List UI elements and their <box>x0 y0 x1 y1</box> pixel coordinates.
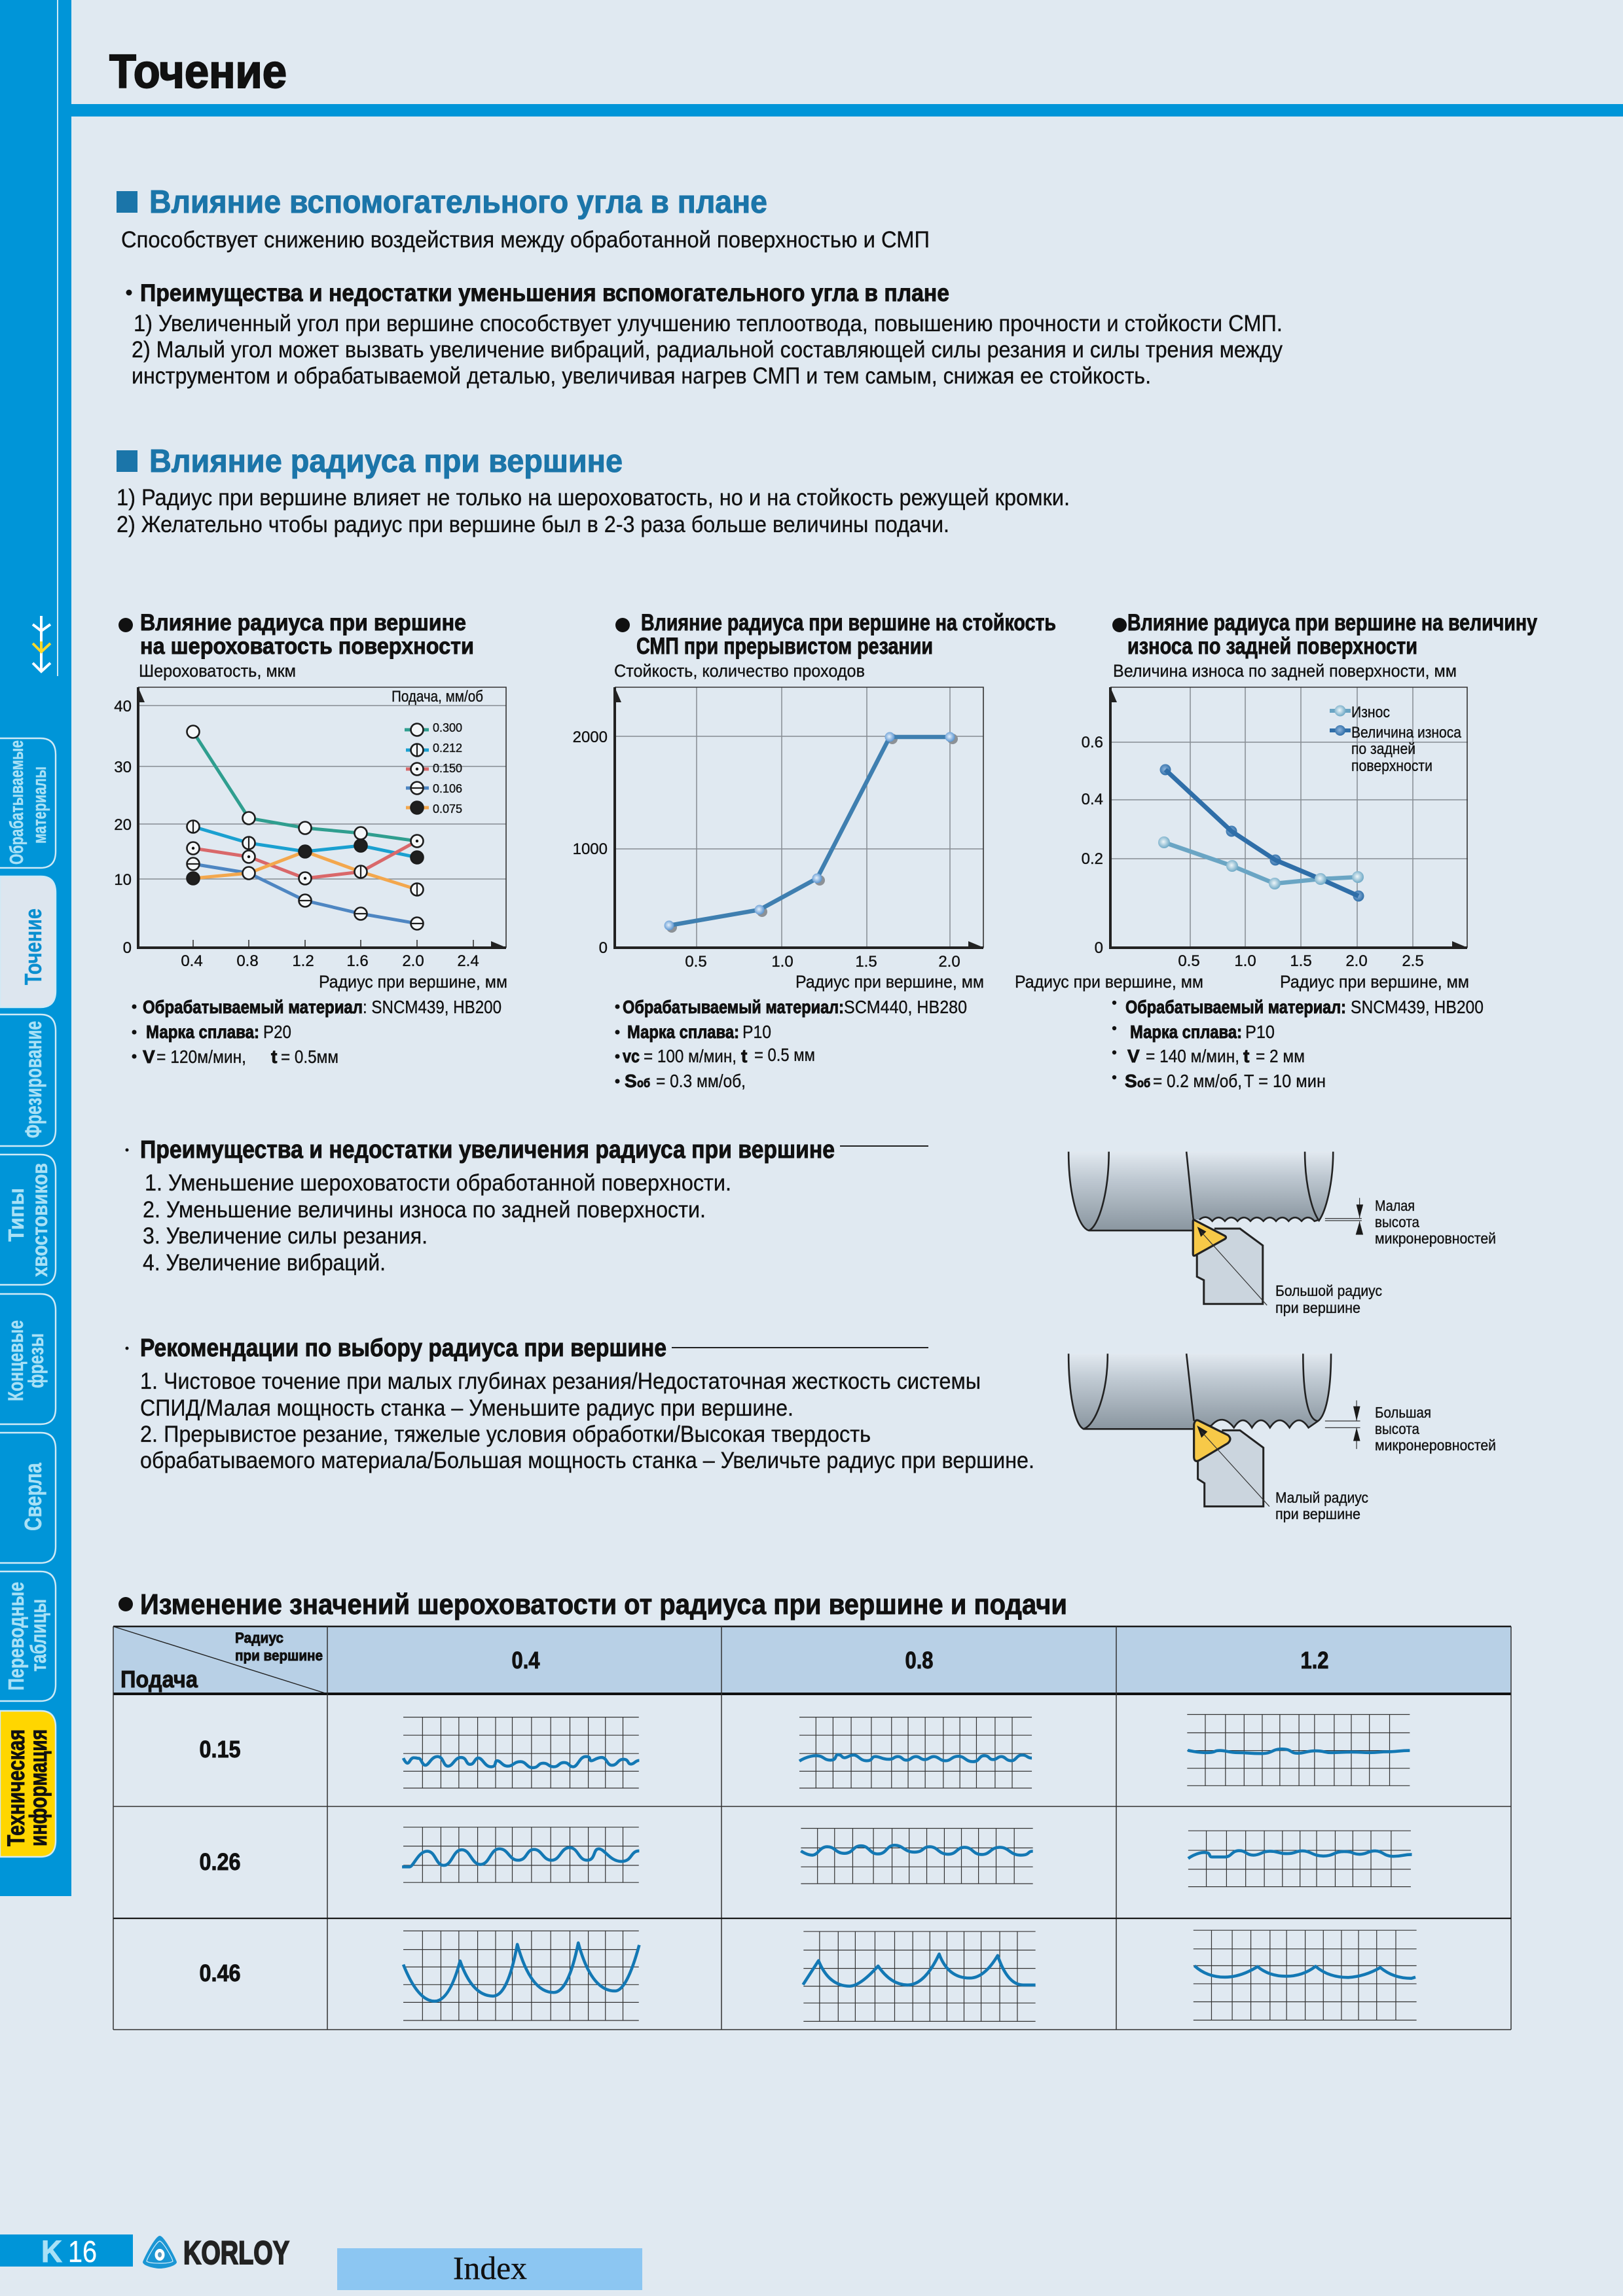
panel: roughness chart <box>114 610 507 1067</box>
line chart: roughness: 30 <box>114 759 132 776</box>
text block: points: 1) Увеличенный угол при вершине способствует улучшению теплоотвода, повышению прочности и стойкости СМП. <box>134 311 1283 336</box>
legend: Величина износа <box>1351 724 1462 742</box>
line chart: flank wear: 2.0 <box>1345 952 1368 970</box>
line chart: flank wear: Радиус при вершине, мм <box>1280 972 1469 992</box>
series markers <box>187 725 423 929</box>
section: side cutting angle <box>117 185 1283 389</box>
footer: page number: K <box>41 2234 62 2269</box>
line chart: tool life: 0.5 <box>685 953 707 971</box>
feed labels: 0.46 <box>199 1960 241 1986</box>
test conditions: P10 <box>1245 1022 1275 1042</box>
legend: по задней <box>1351 740 1415 758</box>
line chart: flank wear: 0.2 <box>1082 850 1103 868</box>
test conditions: Обрабатываемый материал <box>143 997 363 1017</box>
tab: end mills <box>0 1294 56 1424</box>
title rule <box>70 104 1623 117</box>
tab: end mills: Концевые <box>4 1320 27 1401</box>
label: large roughness height: высота <box>1375 1420 1419 1437</box>
chart heading: СМП при прерывистом резании <box>636 634 933 659</box>
line chart: tool life: Радиус при вершине, мм <box>795 972 984 992</box>
label: large nose radius: при вершине <box>1275 1299 1360 1316</box>
text block: intro: Способствует снижению воздействия между обработанной поверхностью и СМП <box>121 227 930 253</box>
line chart: flank wear: 2.5 <box>1402 952 1424 970</box>
table rules <box>113 1626 1511 2030</box>
test conditions: об <box>637 1077 650 1090</box>
label: small nose radius: Малый радиус <box>1275 1489 1368 1506</box>
roughness profiles: radius 0.4 <box>402 1717 639 2020</box>
tab: turning active: Точение <box>20 908 46 985</box>
text block: radius recommendations: 1. Чистовое точение при малых глубинах резания/Недостаточная жесткость системы <box>140 1369 981 1394</box>
test conditions: = 0.5мм <box>281 1047 338 1067</box>
line chart: tool life: 1.5 <box>855 953 877 971</box>
footer: page number <box>0 2234 133 2269</box>
roughness profiles: radius 0.8 and 1.2 <box>799 1714 1417 2021</box>
label: large roughness height: микронеровностей <box>1375 1437 1496 1454</box>
test conditions: об <box>1137 1077 1150 1090</box>
test conditions <box>132 997 501 1067</box>
test conditions: P10 <box>742 1022 771 1042</box>
test conditions: = 2 мм <box>1256 1046 1305 1066</box>
heading: Влияние радиуса при вершине <box>149 444 623 479</box>
logo: Korloy: KORLOY <box>183 2234 289 2271</box>
tab: shank types: хвостовиков <box>27 1163 52 1277</box>
text block: points: 2) Малый угол может вызвать увеличение вибраций, радиальной составляющей силы резания и силы трения между <box>132 337 1283 363</box>
legend: Подача, мм/об <box>392 688 483 706</box>
heading: Влияние вспомогательного угла в плане <box>149 185 767 220</box>
text block: radius recommendations <box>126 1335 1034 1473</box>
legend: Износ <box>1351 704 1390 721</box>
line chart: flank wear: 0.6 <box>1082 734 1103 751</box>
tab: workpiece materials: Обрабатываемые <box>7 740 27 865</box>
line chart: flank wear <box>1015 687 1469 992</box>
label: small roughness height: высота <box>1375 1213 1419 1230</box>
label: large roughness height <box>1375 1404 1496 1454</box>
test conditions: vc <box>623 1046 640 1066</box>
panel: flank wear chart <box>1015 610 1537 1091</box>
label: large nose radius <box>1275 1282 1382 1316</box>
legend: 0.106 <box>433 782 462 795</box>
test conditions: = 100 м/мин, <box>644 1046 737 1066</box>
chart heading <box>1112 610 1537 659</box>
test conditions: S <box>625 1071 637 1091</box>
table header row: Радиус <box>235 1630 283 1646</box>
line chart: roughness: 2.4 <box>457 952 479 970</box>
y axis title: Стойкость, количество проходов <box>614 661 865 681</box>
title: Точение <box>109 46 287 98</box>
test conditions: Обрабатываемый материал: <box>623 997 844 1017</box>
tab: workpiece materials: материалы <box>29 766 50 844</box>
line chart: tool life: 1000 <box>573 840 608 858</box>
panel: tool life chart <box>573 610 1056 1091</box>
tab: turning active <box>0 876 56 1007</box>
tab: technical information active yellow: Техническая <box>3 1729 29 1846</box>
line chart: tool life: 1.0 <box>771 953 793 971</box>
text block: pros and cons of larger radius <box>126 1136 928 1276</box>
text block: pros and cons of larger radius: 1. Уменьшение шероховатости обработанной поверхности. <box>145 1170 731 1196</box>
line chart: roughness: 40 <box>114 698 132 715</box>
text block: pros and cons of larger radius: Преимущества и недостатки увеличения радиуса при вершине <box>140 1136 835 1164</box>
text block: pros and cons of larger radius: 2. Уменьшение величины износа по задней поверхности. <box>143 1197 706 1223</box>
feed labels: 0.15 <box>199 1736 241 1763</box>
subheading: Преимущества и недостатки уменьшения вспомогательного угла в плане <box>140 279 949 306</box>
test conditions: = 0.5 мм <box>754 1045 815 1065</box>
label: large nose radius: Большой радиус <box>1275 1282 1382 1299</box>
tab: shank types <box>0 1155 56 1285</box>
tab: workpiece materials <box>0 738 56 868</box>
test conditions: Марка сплава: <box>146 1022 259 1042</box>
test conditions: Марка сплава: <box>1130 1022 1242 1042</box>
legend: 0.150 <box>433 762 462 775</box>
legend <box>392 688 483 816</box>
line chart: roughness: 0 <box>123 939 132 957</box>
test conditions <box>615 997 967 1091</box>
panel: side navigation <box>0 0 71 1896</box>
text block: pros and cons of larger radius: 3. Увеличение силы резания. <box>143 1223 428 1249</box>
text block: radius recommendations: СПИД/Малая мощность станка – Уменьшите радиус при вершине. <box>140 1395 793 1421</box>
test conditions: : SNCM439, HB200 <box>363 997 501 1017</box>
line chart: roughness <box>114 687 507 992</box>
legend: поверхности <box>1351 757 1432 775</box>
diagram: large nose radius <box>1068 1152 1496 1316</box>
table: roughness vs radius and feed <box>113 1626 1511 2030</box>
legend <box>1330 704 1462 775</box>
icon: navigation arrows <box>33 616 50 672</box>
test conditions: P20 <box>263 1022 291 1042</box>
test conditions: SCM440, HB280 <box>844 997 967 1017</box>
footer: page number: 16 <box>68 2234 97 2269</box>
line chart: tool life: 0 <box>599 939 608 957</box>
line chart: roughness: 1.2 <box>292 952 314 970</box>
line chart: roughness: 20 <box>114 816 132 834</box>
chart heading <box>119 610 474 659</box>
label: small roughness height: микронеровностей <box>1375 1230 1496 1247</box>
legend: 0.300 <box>433 721 462 734</box>
table header row: при вершине <box>235 1647 323 1664</box>
label: small roughness height: Малая <box>1375 1197 1415 1214</box>
tab: technical information active yellow <box>0 1711 56 1857</box>
diagram: small nose radius <box>1068 1354 1496 1522</box>
test conditions: SNCM439, HB200 <box>1351 997 1484 1017</box>
tab: milling <box>0 1014 56 1146</box>
label: large roughness height: Большая <box>1375 1404 1431 1421</box>
test conditions: = 140 м/мин, <box>1146 1046 1239 1066</box>
feed labels <box>199 1736 241 1986</box>
table header row: 0.4 <box>512 1647 539 1674</box>
chart heading: износа по задней поверхности <box>1127 634 1417 659</box>
text block: points <box>132 311 1283 389</box>
tab: technical information active yellow: информация <box>25 1729 52 1846</box>
table header row <box>113 1626 1511 1694</box>
index button: Index <box>453 2250 527 2286</box>
line chart: tool life: 2000 <box>573 728 608 746</box>
label: small nose radius <box>1275 1489 1368 1522</box>
test conditions: t <box>741 1046 747 1066</box>
logo: Korloy <box>143 2234 289 2271</box>
chart heading: Влияние радиуса при вершине на величину <box>1127 610 1537 636</box>
table header row: Подача <box>120 1666 198 1693</box>
test conditions: S <box>1125 1071 1137 1091</box>
table header row: 1.2 <box>1300 1647 1329 1674</box>
index button <box>337 2248 642 2290</box>
test conditions: V <box>143 1047 155 1067</box>
line chart: roughness: 0.4 <box>181 952 203 970</box>
tab: shank types: Типы <box>4 1188 28 1242</box>
test conditions: V <box>1127 1046 1140 1066</box>
label: small roughness height <box>1375 1197 1496 1247</box>
line chart: flank wear: 1.5 <box>1290 952 1312 970</box>
line chart: roughness: 10 <box>114 871 132 889</box>
y axis title: Шероховатость, мкм <box>139 661 296 681</box>
line chart: tool life: 2.0 <box>938 953 960 971</box>
text block: radius recommendations: 2. Прерывистое резание, тяжелые условия обработки/Высокая твердость <box>140 1422 871 1447</box>
line chart: tool life <box>573 687 984 992</box>
tab: milling: Фрезирование <box>21 1021 46 1138</box>
test conditions: t <box>1243 1046 1249 1066</box>
line chart: roughness: Радиус при вершине, мм <box>319 972 507 992</box>
table heading: Изменение значений шероховатости от радиуса при вершине и подачи <box>140 1588 1067 1621</box>
tab: drills: Сверла <box>20 1462 46 1531</box>
line chart: flank wear: 0.5 <box>1178 952 1200 970</box>
line chart: roughness: 1.6 <box>346 952 369 970</box>
table header row: 0.8 <box>905 1647 934 1674</box>
legend: 0.212 <box>433 742 462 755</box>
test conditions: Марка сплава: <box>627 1022 739 1042</box>
series lines <box>193 732 417 924</box>
test conditions: = 0.2 мм/об, <box>1153 1071 1242 1091</box>
test conditions: = 120м/мин, <box>156 1047 246 1067</box>
tab: conversion tables <box>0 1571 56 1701</box>
tab: conversion tables: таблицы <box>26 1599 50 1672</box>
line chart: flank wear: 0.4 <box>1082 791 1103 808</box>
line chart: flank wear: 0 <box>1095 939 1103 957</box>
text block: radius recommendations: Рекомендации по выбору радиуса при вершине <box>140 1335 666 1362</box>
section: nose radius <box>117 444 1070 537</box>
text block: points: инструментом и обрабатываемой деталью, увеличивая нагрев СМП и тем самым, снижая ее стойкость. <box>132 363 1151 389</box>
legend: 0.075 <box>433 802 462 816</box>
line chart: roughness: 2.0 <box>402 952 424 970</box>
test conditions: Обрабатываемый материал: <box>1125 997 1346 1017</box>
text block: radius recommendations: обрабатываемого материала/Большая мощность станка – Увеличьте радиус при вершине. <box>140 1448 1034 1473</box>
chart heading: Влияние радиуса при вершине <box>140 610 466 636</box>
tab: conversion tables: Переводные <box>4 1582 28 1691</box>
test conditions <box>1112 997 1484 1091</box>
test conditions: = 0.3 мм/об, <box>656 1071 746 1091</box>
chart heading: на шероховатость поверхности <box>140 634 474 659</box>
test conditions: t <box>271 1047 277 1067</box>
text block: points: 2) Желательно чтобы радиус при вершине был в 2-3 раза больше величины подачи. <box>117 512 949 537</box>
tab: drills <box>0 1433 56 1563</box>
text block: points <box>117 485 1070 537</box>
chart heading <box>615 610 1056 659</box>
text block: points: 1) Радиус при вершине влияет не только на шероховатость, но и на стойкость режущей кромки. <box>117 485 1070 511</box>
y axis title: Величина износа по задней поверхности, мм <box>1113 661 1457 681</box>
feed labels: 0.26 <box>199 1848 241 1875</box>
line chart: roughness: 0.8 <box>236 952 259 970</box>
test conditions: T = 10 мин <box>1244 1071 1326 1091</box>
tab: end mills: фрезы <box>24 1333 48 1388</box>
line chart: flank wear: 1.0 <box>1234 952 1256 970</box>
text block: pros and cons of larger radius: 4. Увеличение вибраций. <box>143 1250 386 1276</box>
label: small nose radius: при вершине <box>1275 1505 1360 1522</box>
chart heading: Влияние радиуса при вершине на стойкость <box>641 610 1056 636</box>
line chart: flank wear: Радиус при вершине, мм <box>1015 972 1203 992</box>
